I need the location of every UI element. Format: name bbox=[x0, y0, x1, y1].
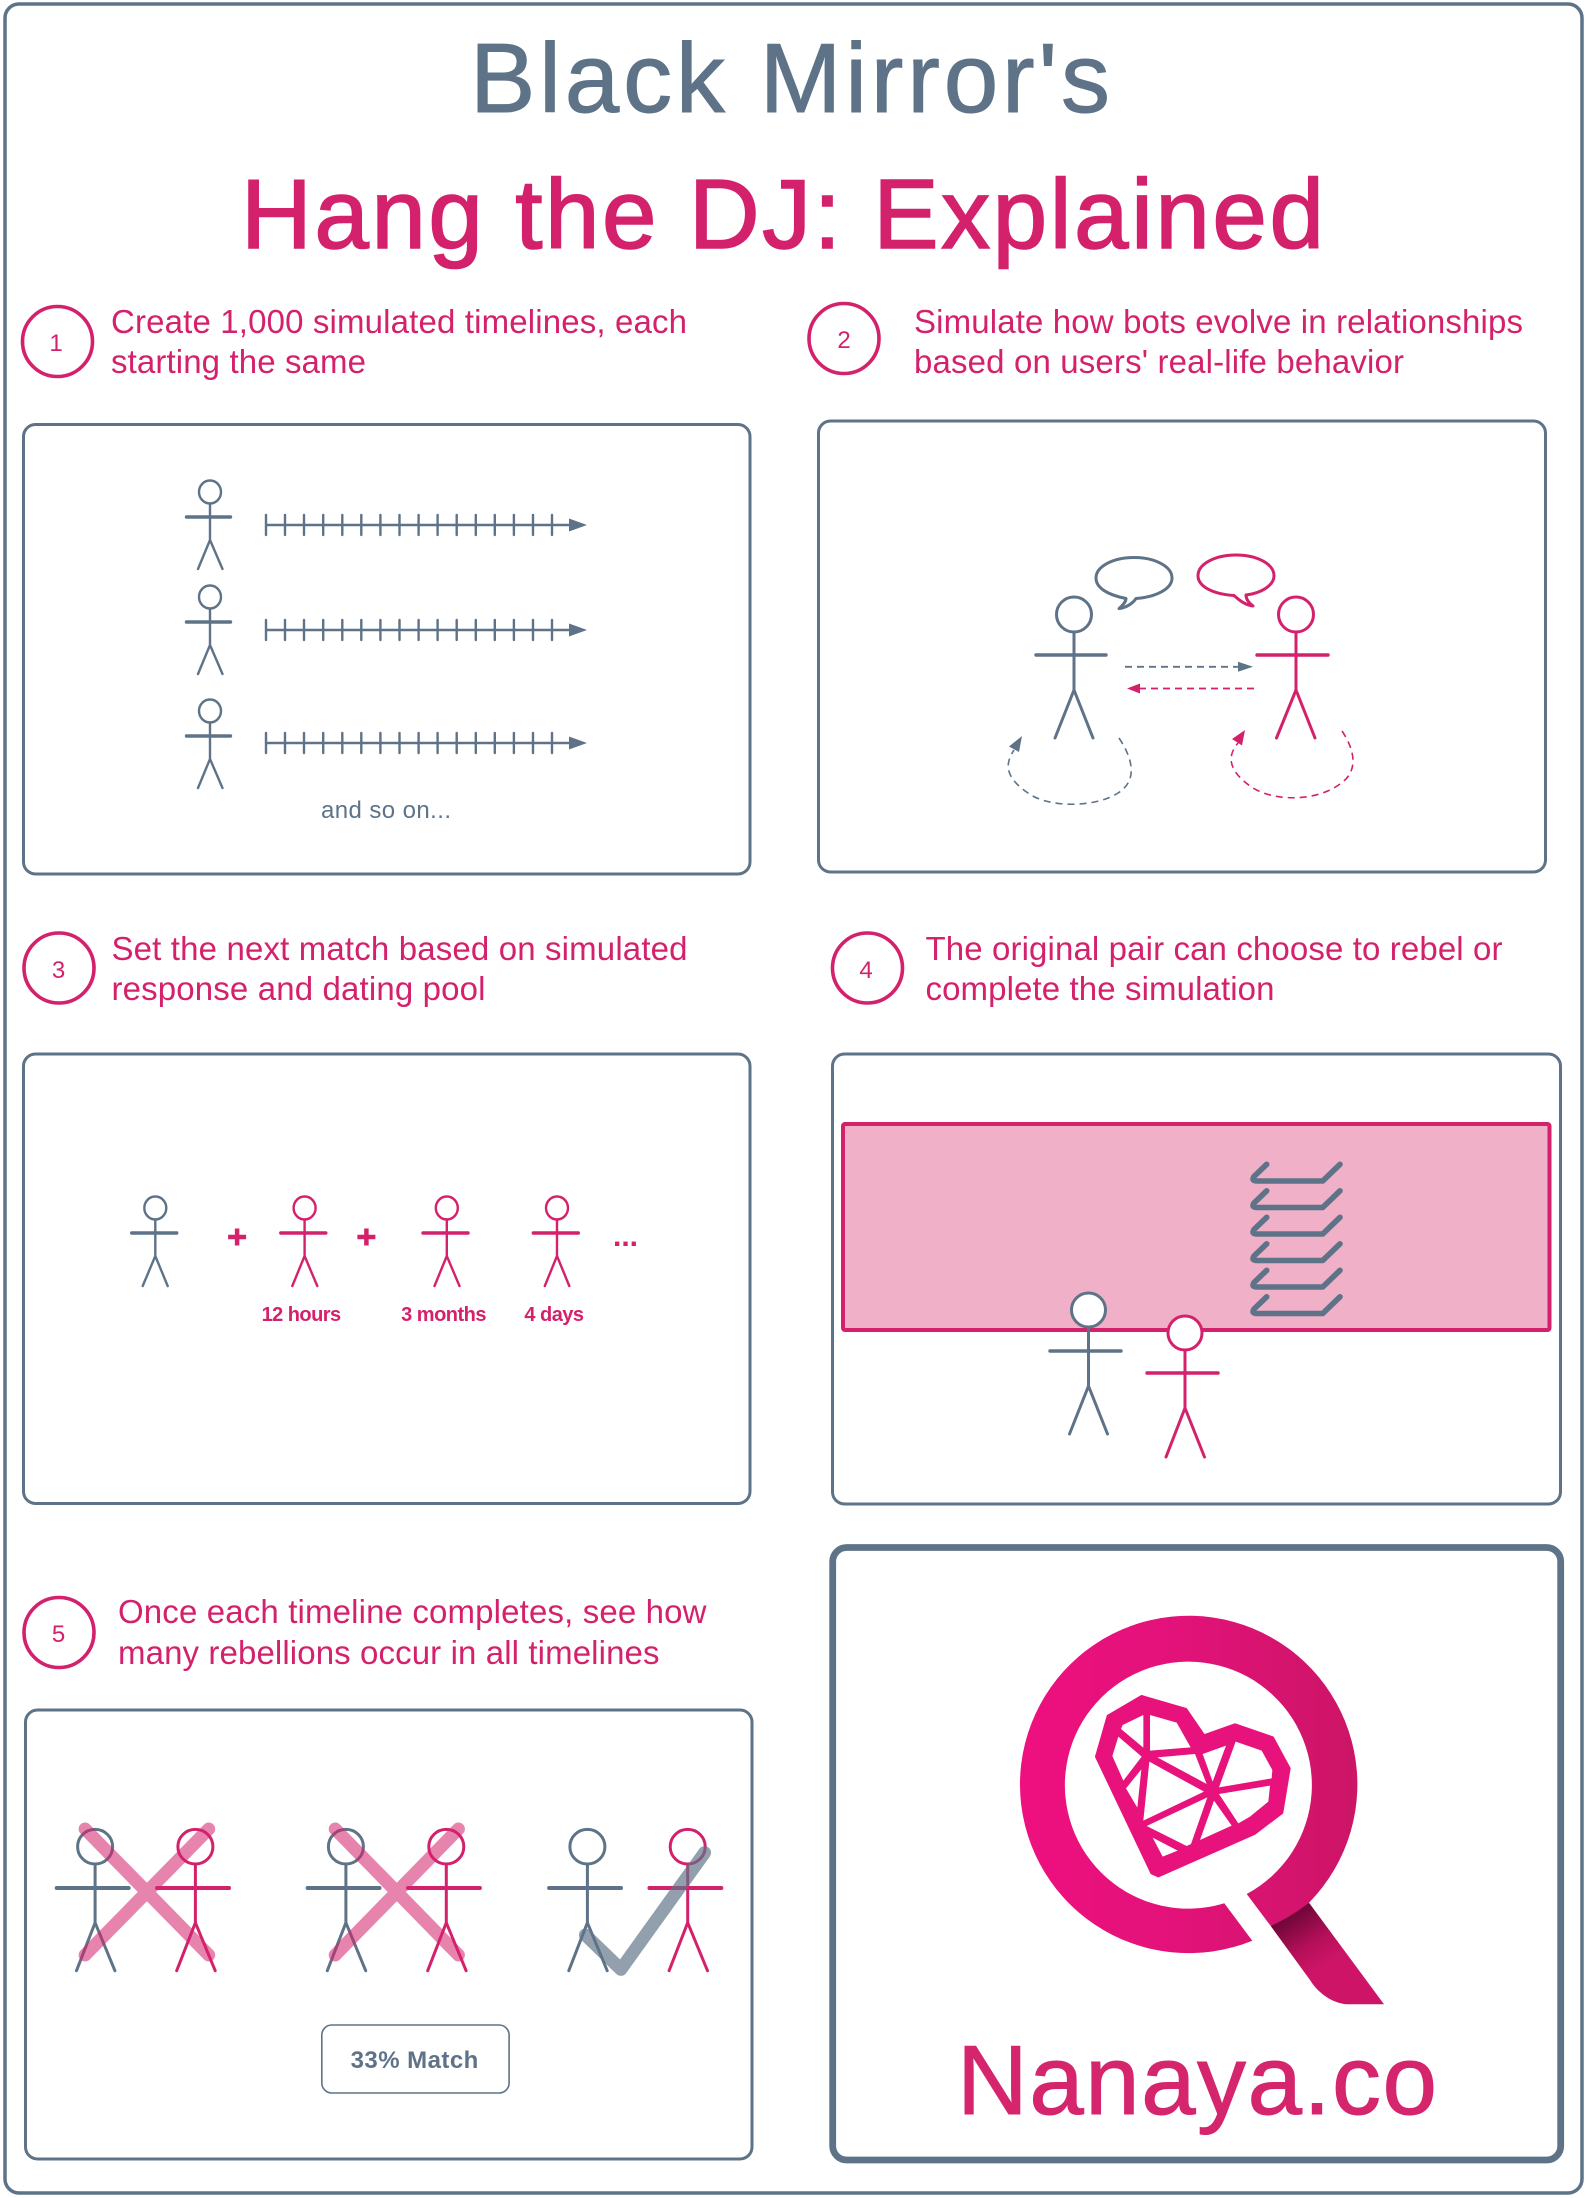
step 3 text: response and dating pool bbox=[112, 970, 486, 1007]
icon: magnifier handle bbox=[1271, 1903, 1384, 2004]
step 2 text: based on users' real-life behavior bbox=[914, 343, 1404, 380]
pink simulation wall bbox=[843, 1124, 1550, 1330]
panel 2 frame bbox=[818, 421, 1546, 872]
step 1 text: Create 1,000 simulated timelines, each bbox=[111, 303, 687, 340]
pair 1 bbox=[57, 1829, 229, 1971]
step 3 heading bbox=[24, 930, 688, 1007]
pair 2 bbox=[308, 1829, 480, 1971]
figure row 2 bbox=[186, 586, 230, 674]
figure row 3 bbox=[186, 700, 230, 788]
step 1 number badge: 1 bbox=[49, 330, 63, 357]
step 3 number badge: 3 bbox=[52, 957, 65, 984]
plus sign 2 bbox=[357, 1228, 375, 1246]
step 4 text: complete the simulation bbox=[926, 970, 1274, 1007]
step 2 text: Simulate how bots evolve in relationships bbox=[914, 303, 1523, 340]
step 4 text: The original pair can choose to rebel or bbox=[926, 930, 1502, 967]
step 5 number badge: 5 bbox=[52, 1621, 65, 1648]
step 1 heading bbox=[22, 303, 687, 380]
pink speech bubble bbox=[1198, 555, 1274, 606]
timeline 1 bbox=[266, 515, 587, 535]
step 5 heading bbox=[24, 1593, 707, 1671]
step 1 text: starting the same bbox=[111, 343, 366, 380]
arrow: pink dashed to left bbox=[1127, 684, 1254, 694]
arrow: gray dashed to right bbox=[1125, 662, 1253, 672]
pink figure: 3 months bbox=[423, 1196, 468, 1286]
step 2 heading bbox=[809, 303, 1523, 380]
logo panel frame bbox=[833, 1548, 1561, 2160]
panel 5: results bbox=[26, 1710, 752, 2159]
timeline 2 bbox=[266, 620, 587, 640]
panel 4: rebellion wall bbox=[832, 1054, 1560, 1504]
gray figure bbox=[132, 1196, 177, 1286]
gray figure at wall bbox=[1050, 1293, 1121, 1434]
gray figure bbox=[1036, 597, 1106, 738]
icon: geometric heart bbox=[1096, 1696, 1289, 1876]
icon: magnifier ring bbox=[1020, 1616, 1357, 1953]
pink figure: 12 hours bbox=[281, 1196, 326, 1286]
pair 3 bbox=[549, 1829, 721, 1971]
match result box: 33% Match bbox=[351, 2047, 478, 2074]
cross mark 2 bbox=[335, 1829, 458, 1955]
label: 4 days: 4 days bbox=[524, 1304, 584, 1326]
ellipsis: ... bbox=[613, 1220, 638, 1253]
ladder rungs bbox=[1253, 1164, 1340, 1314]
caption: and so on: and so on... bbox=[321, 797, 451, 824]
pink figure at wall bbox=[1147, 1316, 1218, 1457]
pink figure: 4 days bbox=[533, 1196, 578, 1286]
check mark bbox=[585, 1853, 705, 1969]
logo wordmark: Nanaya.co bbox=[957, 2025, 1437, 2135]
panel: Nanaya.co logo bbox=[833, 1548, 1561, 2160]
timeline 3 bbox=[266, 733, 587, 753]
cross mark 1 bbox=[85, 1829, 209, 1955]
panel 3: sequence of matches bbox=[24, 1054, 750, 1504]
step 3 text: Set the next match based on simulated bbox=[112, 930, 688, 967]
title line: Black Mirror's: Black Mirror's bbox=[470, 23, 1110, 133]
plus sign 1 bbox=[228, 1228, 246, 1246]
step 4 number badge bbox=[832, 933, 902, 1003]
gray speech bubble bbox=[1096, 558, 1172, 609]
gray self-loop arrow bbox=[1008, 736, 1131, 804]
step 5 number badge bbox=[24, 1598, 94, 1668]
figure row 1 bbox=[186, 480, 230, 569]
label: 12 hours: 12 hours bbox=[262, 1304, 341, 1326]
match result box bbox=[322, 2025, 509, 2093]
panel 4 frame bbox=[832, 1054, 1560, 1504]
step 4 number badge: 4 bbox=[859, 957, 873, 984]
panel 2: bots conversing bbox=[818, 421, 1546, 872]
step 2 number badge: 2 bbox=[837, 327, 851, 354]
pink self-loop arrow bbox=[1231, 730, 1353, 798]
step 3 number badge bbox=[24, 933, 94, 1003]
panel 5 frame bbox=[26, 1710, 752, 2159]
step 5 text: many rebellions occur in all timelines bbox=[118, 1634, 660, 1671]
panel 3 frame bbox=[24, 1054, 750, 1504]
step 4 heading bbox=[832, 930, 1502, 1007]
step 2 number badge bbox=[809, 304, 879, 374]
panel 1: timelines bbox=[24, 424, 750, 874]
title bbox=[241, 23, 1324, 269]
pink figure bbox=[1257, 597, 1328, 738]
step 5 text: Once each timeline completes, see how bbox=[118, 1593, 707, 1630]
panel 1 frame bbox=[24, 424, 750, 874]
label: 3 months: 3 months bbox=[401, 1304, 486, 1326]
title line: Hang the DJ: Explained: Hang the DJ: Explained bbox=[241, 159, 1324, 269]
step 1 number badge bbox=[22, 306, 92, 376]
